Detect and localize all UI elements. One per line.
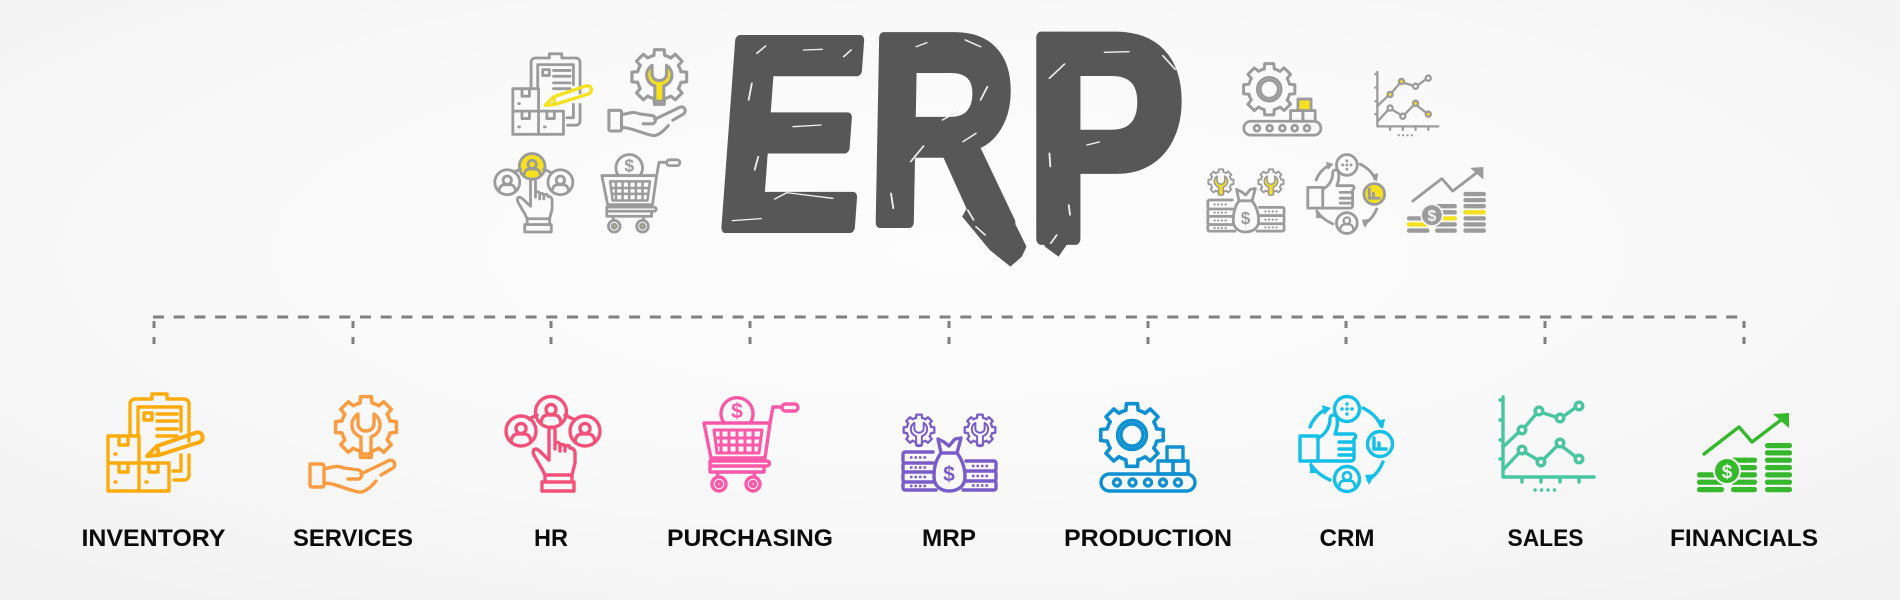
module: financials (1670, 413, 1818, 552)
label: financials: FINANCIALS (1670, 525, 1818, 552)
icon: hand with wrench gear (310, 396, 397, 492)
module: sales (1500, 397, 1594, 552)
icon: shopping cart with coin (704, 398, 798, 491)
top icon: production (1243, 63, 1321, 135)
module: inventory (82, 394, 226, 552)
icon: coin stacks with rising arrow (1697, 413, 1792, 492)
top icon: MRP (1208, 169, 1284, 232)
icon: money bag with gears: $ (943, 463, 955, 486)
module: production (1064, 404, 1232, 552)
top icon: purchasing: $ (624, 155, 634, 175)
label: sales: SALES (1508, 525, 1584, 552)
top icon: sales (1375, 72, 1438, 135)
label: HR: HR (534, 525, 568, 552)
top icon: inventory (513, 54, 591, 134)
icon: line chart (1500, 397, 1594, 490)
module: purchasing (667, 398, 833, 552)
label: MRP: MRP (922, 525, 976, 552)
top icon: HR (495, 154, 573, 232)
dashed connector tree (153, 317, 1746, 345)
label: purchasing: PURCHASING (667, 525, 833, 552)
icon: inventory boxes and clipboard (108, 394, 203, 491)
module: MRP (903, 415, 996, 552)
icon: coin stacks with rising arrow: $ (1722, 462, 1733, 483)
top icon: services (609, 50, 687, 136)
top icon: CRM (1308, 155, 1385, 233)
top icon: MRP: $ (1241, 208, 1251, 228)
module: CRM (1300, 396, 1392, 552)
icon: shopping cart with coin: $ (731, 400, 743, 423)
label: production: PRODUCTION (1064, 525, 1232, 552)
label: inventory: INVENTORY (82, 525, 226, 552)
module: services (293, 396, 413, 552)
icon: thumbs up cycle (1300, 396, 1392, 492)
module: HR (506, 396, 600, 552)
top icon: financials: $ (1428, 208, 1437, 225)
label: CRM: CRM (1320, 525, 1374, 552)
label: services: SERVICES (293, 525, 413, 552)
top icon: financials (1407, 167, 1486, 233)
brush tails and highlights (733, 32, 1175, 267)
top icon: purchasing (602, 155, 680, 232)
icon: hand selecting people (506, 396, 600, 491)
icon: gear and conveyor (1101, 404, 1195, 491)
title: ERP brush lettering (707, 0, 1185, 301)
